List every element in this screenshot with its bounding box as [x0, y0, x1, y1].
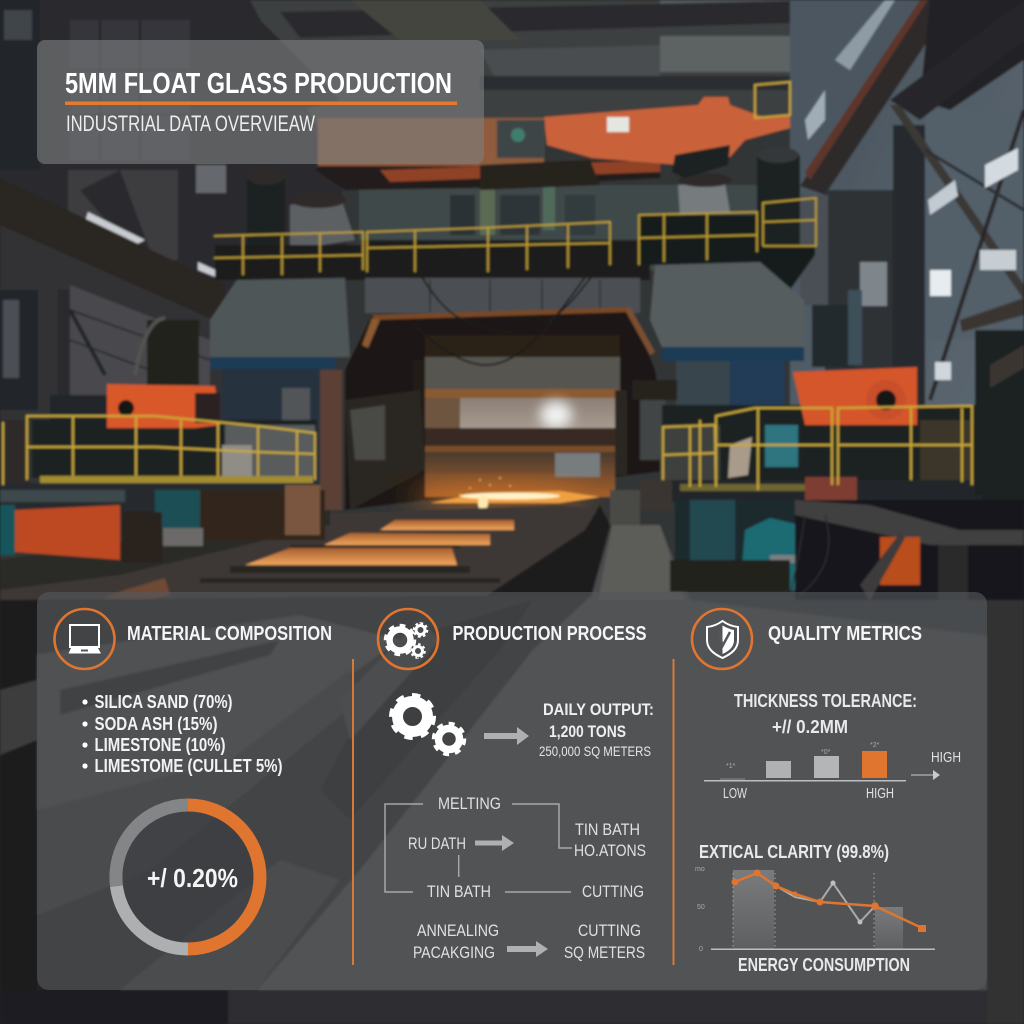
- panel: production process: [378, 609, 654, 962]
- composition list: SODA ASH (15%): [94, 714, 218, 734]
- process flow: TIN BATH: [427, 882, 491, 901]
- cables: [400, 240, 604, 365]
- title underline: [65, 102, 457, 105]
- dark rails under lower panel: [0, 595, 592, 1024]
- line chart: clarity and energy: [695, 866, 935, 953]
- right building wall: [790, 0, 1024, 520]
- daily output text: [539, 700, 654, 759]
- left building wall: [0, 0, 350, 420]
- process flow: [385, 794, 646, 962]
- arrow: [484, 727, 529, 745]
- label: energy consumption: ENERGY CONSUMPTION: [738, 955, 910, 975]
- daily output text: 250,000 SQ METERS: [539, 743, 651, 759]
- composition list: [82, 692, 283, 776]
- thickness tolerance: THICKNESS TOLERANCE:: [734, 691, 917, 711]
- process flow: CUTTING: [578, 921, 641, 940]
- bar chart: tolerance: *1*: [726, 763, 736, 770]
- ceiling: [200, 0, 840, 130]
- bar chart: tolerance: [704, 742, 961, 802]
- title: 5MM FLOAT GLASS PRODUCTION: [65, 68, 452, 100]
- line chart: clarity and energy: mo: [695, 866, 705, 873]
- heading: quality metrics: QUALITY METRICS: [768, 623, 922, 645]
- heading: production process: PRODUCTION PROCESS: [452, 623, 646, 645]
- subtitle: INDUSTRIAL DATA OVERVIEAW: [66, 111, 315, 136]
- header panel: [37, 40, 484, 164]
- bar chart: tolerance: HIGH: [931, 749, 961, 766]
- line chart: clarity and energy: 50: [697, 904, 705, 911]
- donut chart: +/ 0.20%: [147, 863, 238, 893]
- bar chart: tolerance: HIGH: [866, 785, 894, 802]
- process flow: ANNEALING: [417, 921, 499, 940]
- sparks: [410, 477, 600, 511]
- divider 2: [672, 659, 674, 965]
- composition list: LIMESTONE (10%): [94, 735, 226, 755]
- process flow: TIN BATH: [575, 820, 640, 839]
- process flow: MELTING: [438, 794, 501, 813]
- panel: quality metrics: [692, 609, 961, 975]
- process flow: SQ METERS: [564, 943, 645, 962]
- bar chart: tolerance: LOW: [723, 785, 748, 802]
- line chart: clarity and energy: 0: [699, 946, 703, 953]
- divider 1: [352, 659, 354, 965]
- floor and furnace rails: [0, 505, 610, 600]
- right side machinery: [660, 290, 1024, 600]
- composition list: LIMESTOME (CULLET 5%): [94, 756, 283, 776]
- thickness tolerance: [734, 691, 917, 737]
- thickness tolerance: +// 0.2MM: [772, 717, 848, 737]
- tunnel opening with furnace glow: [345, 307, 677, 510]
- panel: material composition: [54, 609, 332, 949]
- daily output text: 1,200 TONS: [549, 722, 626, 741]
- process flow: HO.ATONS: [574, 841, 646, 860]
- process flow: RU DATH: [408, 834, 466, 853]
- crane beam: [315, 82, 790, 190]
- heading: optical clarity: EXTICAL CLARITY (99.8%): [699, 842, 889, 862]
- lower data panel: [37, 592, 987, 990]
- walkway floor: [228, 480, 1024, 1024]
- floor margins outside panel: [0, 600, 1024, 1024]
- process flow: PACAKGING: [413, 943, 495, 962]
- process flow: CUTTING: [582, 882, 644, 901]
- upper railings: [214, 198, 816, 275]
- daily output text: DAILY OUTPUT:: [543, 700, 654, 719]
- icon: shield: [692, 609, 752, 669]
- central machine block: [215, 147, 815, 313]
- icon: gears: [378, 609, 438, 669]
- icon: laptop: [54, 609, 114, 669]
- icon: large gears: [391, 695, 464, 754]
- left side machinery: [0, 318, 325, 562]
- donut chart: [116, 805, 260, 949]
- bar chart: tolerance: *2*: [870, 742, 880, 749]
- bar chart: tolerance: *0*: [821, 749, 831, 756]
- heading: material composition: MATERIAL COMPOSITION: [127, 623, 332, 645]
- composition list: SILICA SAND (70%): [94, 692, 232, 712]
- left and right pressing blocks: [210, 262, 804, 510]
